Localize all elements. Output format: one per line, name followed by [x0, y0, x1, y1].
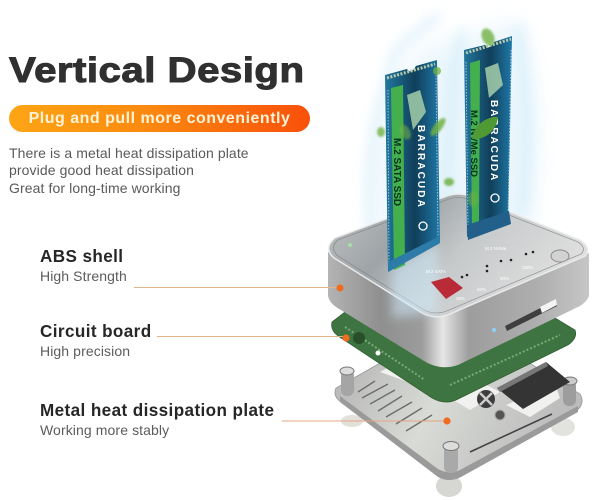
- top panel labels: M.2 NVMe: [485, 246, 507, 251]
- metal heat dissipation plate: [335, 335, 582, 480]
- airflow over device: [392, 244, 438, 318]
- red display: [431, 277, 463, 299]
- description text: [9, 145, 249, 196]
- top panel labels: 100%: [522, 265, 534, 270]
- label: metal heat dissipation plate: Working more stably: [40, 422, 169, 438]
- description text: There is a metal heat dissipation plate: [9, 145, 249, 161]
- card slot: [505, 300, 557, 331]
- SSD left: M.2 SATA: M.2 SATA SSD: [391, 138, 402, 206]
- power button: [551, 250, 569, 262]
- label: circuit board: Circuit board: [40, 322, 152, 341]
- ribbon connector: [497, 362, 570, 409]
- airflow glow: [369, 15, 538, 245]
- title: Vertical Design: [9, 51, 304, 90]
- SSD right: M.2 NVMe SSD: M.2 NVMe SSD: [468, 110, 479, 177]
- description text: Great for long-time working: [9, 180, 181, 196]
- orange subtitle pill: Plug and pull more conveniently: [29, 110, 290, 127]
- label: ABS shell: ABS shell: [40, 247, 123, 266]
- label: metal heat dissipation plate: [40, 401, 274, 438]
- SSD left: M.2 SATA: [385, 60, 440, 272]
- label: circuit board: High precision: [40, 343, 130, 359]
- SSD left: M.2 SATA: BARRACUDA: [415, 125, 426, 209]
- leader line: circuit board: [157, 334, 350, 342]
- top panel labels: 30%: [456, 296, 465, 301]
- label: metal heat dissipation plate: Metal heat dissipation plate: [40, 401, 274, 420]
- top panel labels: M.2 SATA: [426, 269, 446, 274]
- label: circuit board: [40, 322, 152, 359]
- label: ABS shell: [40, 247, 127, 284]
- top panel labels: 90%: [500, 276, 509, 281]
- description text: provide good heat dissipation: [9, 162, 194, 178]
- leader line: ABS shell: [134, 284, 344, 292]
- plate feet discs: [341, 415, 575, 497]
- top panel labels: [426, 246, 534, 301]
- orange subtitle pill: [9, 105, 310, 132]
- SSD right: M.2 NVMe SSD: [464, 36, 512, 240]
- ABS shell: [328, 194, 589, 367]
- leaves: [377, 26, 498, 207]
- label: ABS shell: High Strength: [40, 268, 127, 284]
- top panel labels: 60%: [477, 287, 486, 292]
- circuit board: [332, 312, 576, 409]
- leader line: metal plate: [282, 417, 451, 425]
- SSD right: M.2 NVMe SSD: BARRACUDA: [488, 100, 499, 182]
